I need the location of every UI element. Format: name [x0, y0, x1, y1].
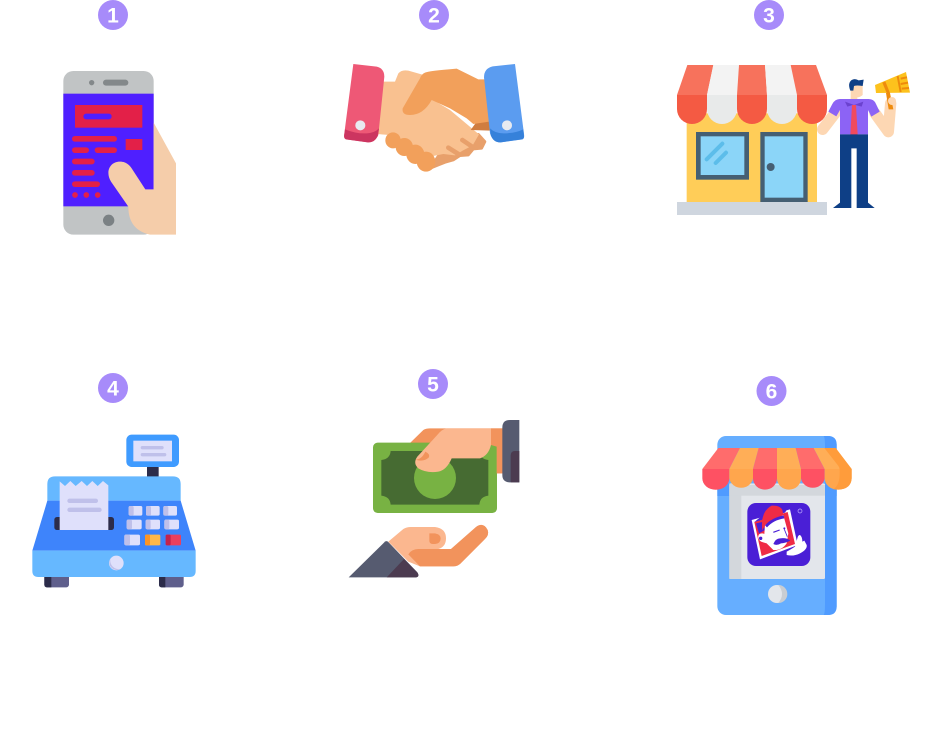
badge: step 6: 6 [766, 380, 777, 404]
icon: mobile storefront with app logo [702, 436, 852, 615]
badge: step 5 [418, 369, 448, 399]
badge: step 4: 4 [107, 378, 119, 400]
icon: hand holding smartphone [63, 71, 176, 235]
man [828, 72, 910, 208]
icon: hands exchanging banknote [349, 420, 519, 577]
icon: cash register [32, 435, 196, 587]
badge: step 2: 2 [428, 4, 440, 28]
badge: step 1 [98, 0, 128, 30]
badge: step 3 [754, 0, 784, 30]
badge: step 1: 1 [107, 4, 119, 28]
icon: handshake [344, 64, 524, 172]
app logo [747, 503, 810, 566]
badge: step 3: 3 [763, 4, 775, 28]
icon: storefront with man and megaphone [677, 65, 910, 215]
badge: step 5: 5 [427, 374, 439, 396]
badge: step 4 [98, 373, 128, 403]
badge: step 6 [756, 376, 786, 406]
badge: step 2 [419, 0, 449, 30]
